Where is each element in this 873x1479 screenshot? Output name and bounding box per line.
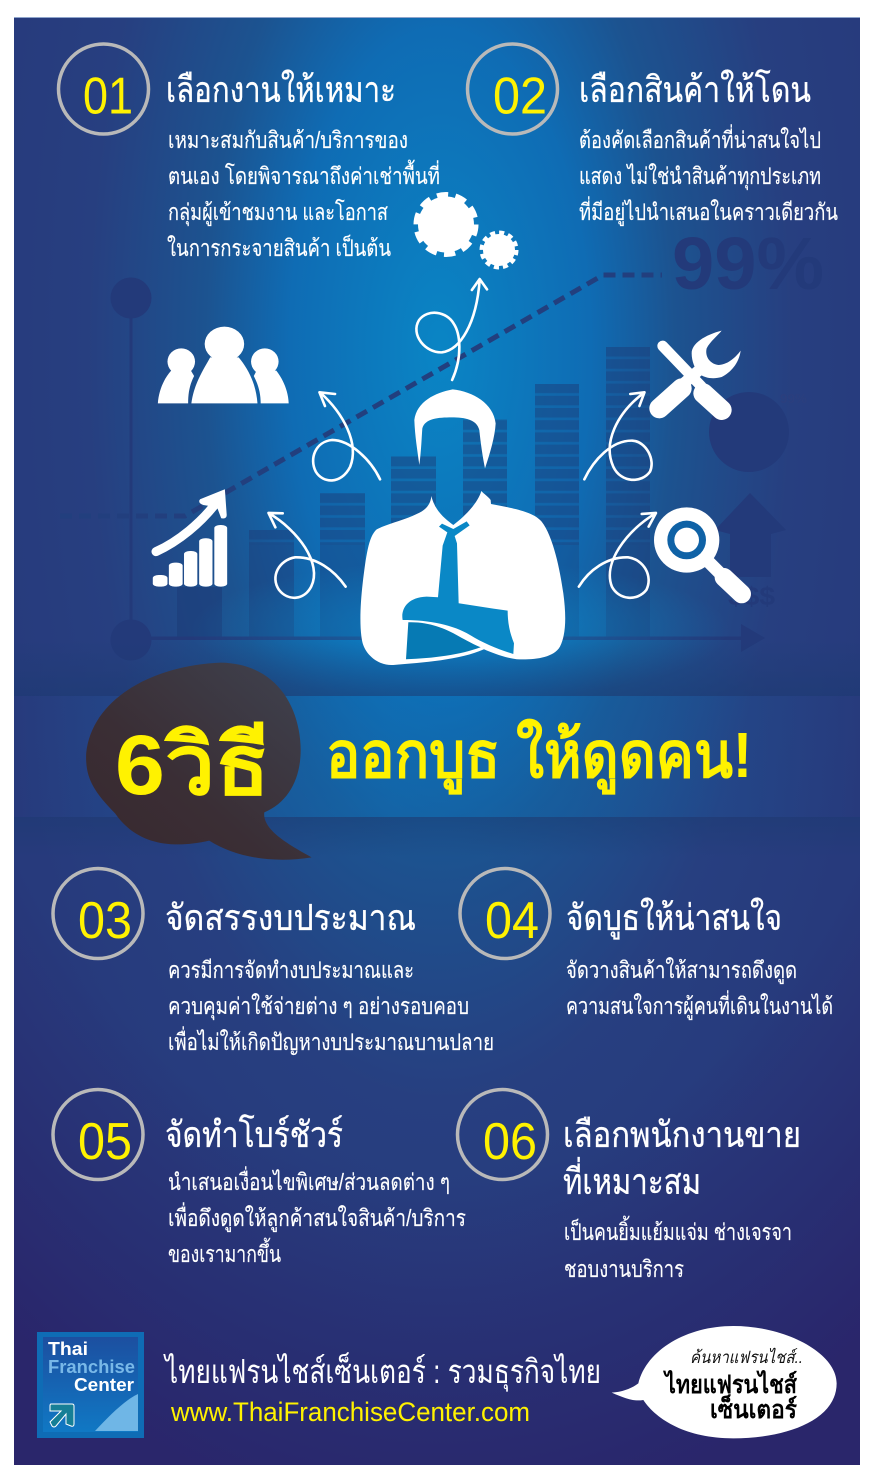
number badge 06 [458, 1090, 548, 1180]
block 02 [468, 44, 838, 226]
body text 05: นำเสนอเงื่อนไขพิเศษ/ส่วนลดต่าง ๆ [168, 1166, 450, 1195]
block 06 [458, 1090, 801, 1282]
number badge 03 [53, 868, 143, 958]
body text 05: เพื่อดึงดูดให้ลูกค้าสนใจสินค้า/บริการ [168, 1202, 466, 1232]
body text 01: กลุ่มผู้เข้าชมงาน และโอกาส [168, 199, 388, 226]
hair [414, 389, 496, 468]
heading 02: เลือกสินค้าให้โดน [579, 69, 811, 110]
number badge 04: 04 [485, 892, 539, 950]
lower arm cut-out [406, 622, 481, 659]
footer title: ไทยแฟรนไชส์เซ็นเตอร์ : รวมธุรกิจไทย [163, 1352, 601, 1392]
number badge 05: 05 [78, 1113, 132, 1171]
body text 04: จัดวางสินค้าให้สามารถดึงดูด [566, 957, 797, 984]
arrow: lower left [268, 513, 346, 598]
icon: people [158, 327, 289, 403]
body text 04 [566, 957, 833, 1020]
body text 03: ควบคุมค่าใช้จ่ายต่าง ๆ อย่างรอบคอบ [168, 993, 469, 1020]
heading 05: จัดทำโบร์ชัวร์ [165, 1114, 343, 1155]
torso [360, 491, 565, 665]
background chart: $$$ [728, 581, 776, 611]
icon: tools [659, 331, 741, 410]
arrow: lower right [579, 513, 656, 598]
heading 03: จัดสรรงบประมาณ [165, 897, 416, 938]
curly arrows [268, 279, 656, 598]
number badge 03: 03 [78, 892, 132, 950]
body text 03: เพื่อไม่ให้เกิดปัญหางบประมาณบานปลาย [168, 1026, 494, 1055]
logo: Thai Franchise Center [37, 1332, 144, 1438]
body text 05 [168, 1166, 466, 1267]
number badge 02: 02 [493, 68, 547, 126]
speech bubble: search [612, 1326, 837, 1438]
number badge 05 [53, 1090, 143, 1180]
number badge 01 [58, 44, 148, 134]
logo: Thai Franchise Center: Thai [48, 1339, 88, 1359]
arrow: upper right [584, 392, 652, 480]
icon: growth chart [153, 489, 227, 587]
heading 06: เลือกพนักงานขาย [563, 1114, 801, 1155]
body text 06: เป็นคนยิ้มแย้มแจ่ม ช่างเจรจา [564, 1216, 792, 1245]
body text 01: ตนเอง โดยพิจารณาถึงค่าเช่าพื้นที่ [168, 160, 440, 189]
banner band [14, 560, 860, 857]
banner [86, 663, 752, 860]
number badge 01: 01 [83, 68, 133, 126]
background chart [60, 222, 824, 660]
arrow: top [416, 279, 487, 380]
block 01 [58, 44, 440, 261]
speech bubble: search: เซ็นเตอร์ [710, 1394, 798, 1424]
figure: businessman [360, 389, 565, 665]
body text 06: ชอบงานบริการ [564, 1256, 684, 1282]
heading 04: จัดบูธให้น่าสนใจ [566, 897, 782, 940]
number badge 02 [468, 44, 558, 134]
number badge 04 [460, 868, 550, 958]
background chart: 99% [780, 391, 807, 406]
speech bubble: search: ค้นหาแฟรนไชส์.. [690, 1347, 803, 1367]
number badge 06: 06 [483, 1113, 537, 1171]
speech bubble: dark [86, 663, 312, 860]
icon: magnifier [654, 507, 742, 594]
body text 02: ต้องคัดเลือกสินค้าที่น่าสนใจไป [579, 124, 821, 153]
body text 01 [167, 127, 440, 261]
heading 06: ที่เหมาะสม [563, 1157, 701, 1202]
headline: booth: ออกบูธ ให้ดูดคน! [326, 718, 752, 795]
block 05 [53, 1090, 466, 1267]
logo: Thai Franchise Center: Franchise [48, 1357, 135, 1377]
sleeve cut-out [493, 598, 517, 609]
block 03 [53, 868, 494, 1055]
speech bubble: search: ไทยแฟรนไชส์ [662, 1369, 798, 1399]
block 04 [460, 868, 833, 1020]
heading 06 [563, 1114, 801, 1202]
body text 05: ของเรามากขึ้น [168, 1238, 281, 1267]
body text 06 [564, 1216, 792, 1282]
body text 02 [579, 124, 838, 226]
icon: gears [417, 196, 516, 267]
footer url: www.ThaiFranchiseCenter.com [170, 1397, 530, 1427]
body text 01: เหมาะสมกับสินค้า/บริการของ [168, 127, 408, 153]
headline: 6 ways: 6วิธี [115, 718, 270, 812]
arrow: upper left [313, 392, 380, 480]
logo: Thai Franchise Center: Center [74, 1375, 134, 1395]
heading 01: เลือกงานให้เหมาะ [166, 69, 396, 110]
body text 03: ควรมีการจัดทำงบประมาณและ [168, 957, 414, 983]
body text 01: ในการกระจายสินค้า เป็นต้น [167, 233, 391, 261]
tie and arm cut-out [402, 521, 514, 654]
body text 03 [168, 957, 494, 1055]
background chart: 99% [672, 222, 824, 305]
